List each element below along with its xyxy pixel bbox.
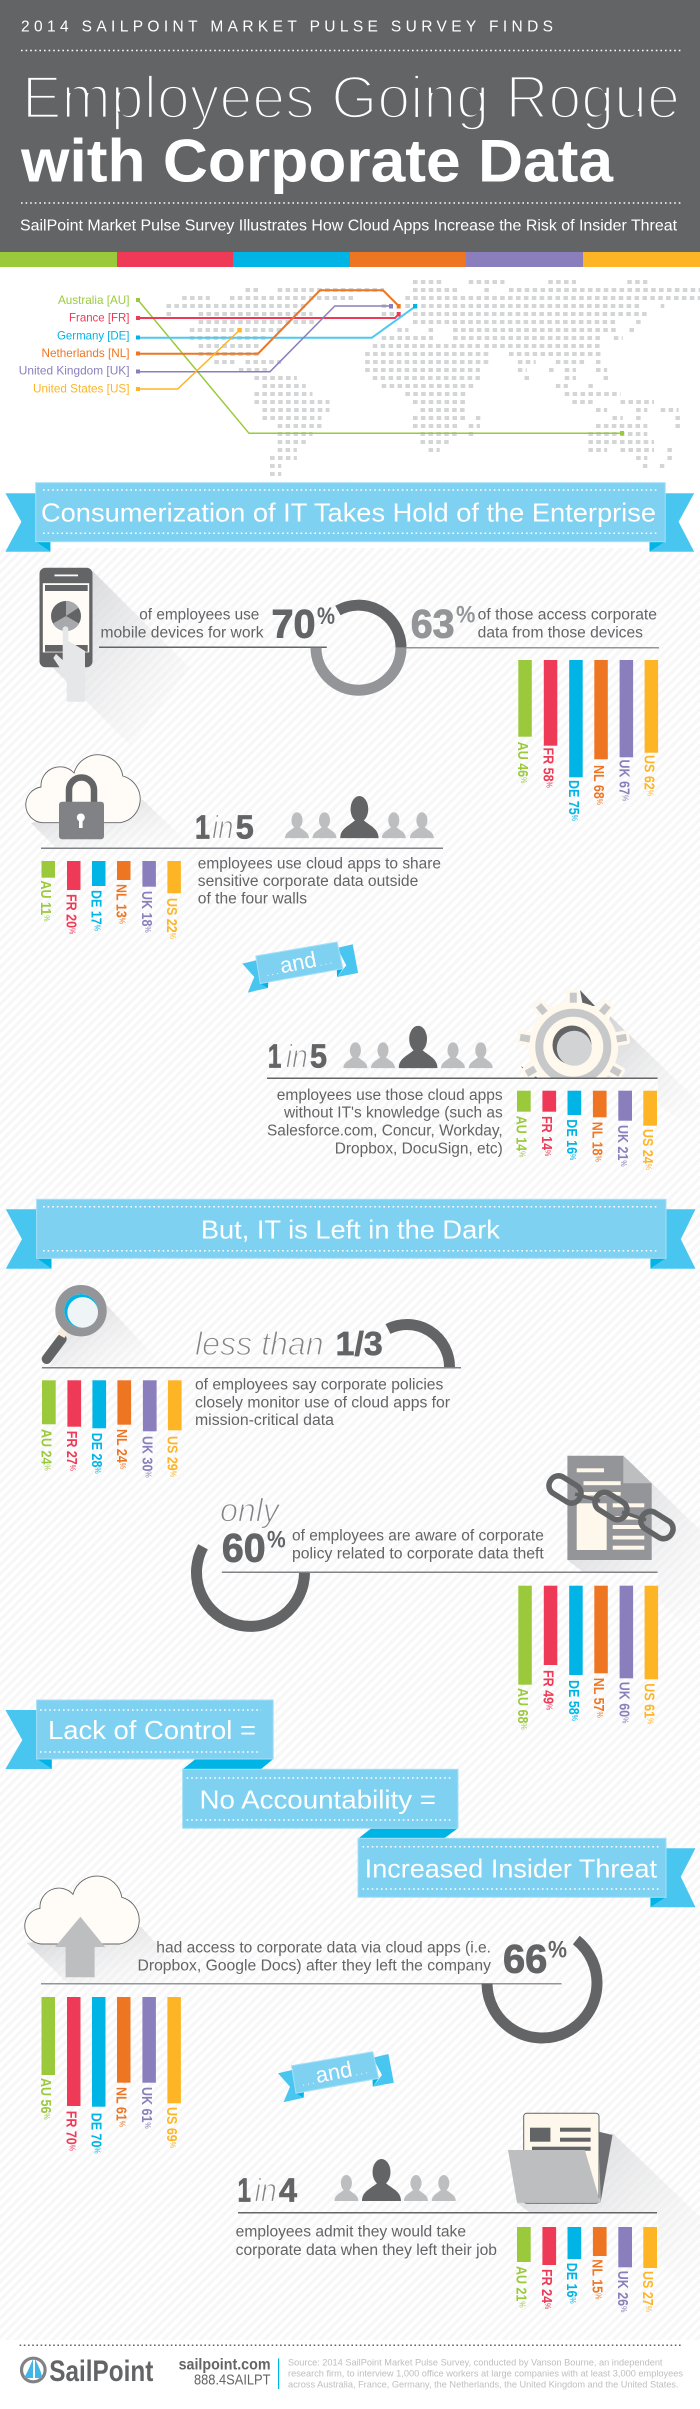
bar: FR 14: FR 14 <box>539 1116 555 1150</box>
people icons <box>343 1026 493 1068</box>
contact details: 888.4SAILPT <box>194 2371 270 2388</box>
bar: FR 24: % <box>543 2303 553 2309</box>
bar: FR 58: % <box>544 782 554 788</box>
stat: 1 in 4: 4 <box>279 2172 298 2209</box>
stat: 1 in 5 share data <box>41 796 443 907</box>
bar: US 27 <box>640 2227 657 2312</box>
stat: 66 percent: had access to corporate data via cloud apps (i.e. <box>156 1940 491 1957</box>
bar: AU 21: % <box>518 2301 527 2308</box>
bar: AU 68: % <box>519 1723 529 1730</box>
stat: 1 in 5 share data: sensitive corporate data outside <box>198 873 418 890</box>
bar: AU 68 <box>515 1586 532 1730</box>
stat: 70 percent: mobile devices for work <box>100 624 264 641</box>
bar: AU 68: AU 68 <box>515 1688 531 1723</box>
bar: FR 49 <box>540 1586 557 1710</box>
arc chart <box>197 1547 304 1626</box>
bar: NL 15: NL 15 <box>589 2259 606 2293</box>
line: United Kingdom <box>136 304 393 374</box>
bar: FR 20: FR 20 <box>63 894 80 928</box>
stat: 1 in 4: 1 <box>238 2172 251 2209</box>
stat: only 60 percent: only <box>220 1492 281 1529</box>
title line one: Employees Going Rogue <box>22 64 680 131</box>
stat: 1 in 5 share data: of the four walls <box>198 890 307 907</box>
bar: DE 58: DE 58 <box>566 1680 582 1715</box>
bar: US 22 <box>164 861 181 939</box>
header panel <box>0 0 700 252</box>
stat: 63 percent: 63 <box>411 602 454 646</box>
bar: UK 67: UK 67 <box>616 760 632 795</box>
ribbon: increased insider threat: Increased Insider Threat <box>365 1853 658 1883</box>
bar: US 69: US 69 <box>164 2107 180 2142</box>
bar: UK 61 <box>139 1997 156 2129</box>
bar: UK 21: UK 21 <box>615 1125 631 1160</box>
stat: 1 in 5 share data: 5 <box>236 808 254 845</box>
bar: NL 61: % <box>118 2121 127 2127</box>
stat: 1 in 5 without IT knowledge: in <box>286 1037 308 1074</box>
stat: 1 in 5 share data: 1 <box>195 808 210 845</box>
bar: UK 67: % <box>620 795 630 801</box>
bar: US 61: US 61 <box>641 1683 657 1718</box>
title line two: with Corporate Data <box>20 128 614 195</box>
bar: NL 24: NL 24 <box>114 1429 130 1463</box>
stat: 1 in 5 share data: employees use cloud apps to share <box>198 855 441 872</box>
bar: FR 27: % <box>68 1465 78 1471</box>
icon: folder with document <box>508 2113 700 2300</box>
bar: NL 24 <box>114 1380 131 1469</box>
bar chart: mobile access by country <box>515 660 658 821</box>
ribbon heading: IT in the dark <box>6 1199 696 1269</box>
stat: 1 in 5 without IT knowledge: without IT's knowledge (such as <box>283 1105 503 1122</box>
country legend: Germany [DE] <box>57 328 130 342</box>
stat: 63 percent: of those access corporate <box>478 606 657 623</box>
bar: NL 24: % <box>118 1463 128 1469</box>
bar: FR 70 <box>63 1997 80 2151</box>
stat: 66 percent: 66 <box>503 1937 547 1981</box>
bar: FR 49: % <box>544 1704 554 1710</box>
bar: NL 61: NL 61 <box>113 2087 130 2121</box>
icon: cloud with upload arrow <box>25 1876 192 1983</box>
stat: less than one third <box>42 1325 461 1429</box>
map legend lines <box>136 290 624 436</box>
bar: FR 27 <box>64 1380 81 1471</box>
bar: FR 49: FR 49 <box>540 1670 557 1704</box>
line: Australia <box>136 298 624 436</box>
bar: DE 75 <box>566 660 583 821</box>
bar: DE 58: % <box>570 1715 580 1721</box>
stat: 1 in 5 without IT knowledge: employees use those cloud apps <box>277 1087 503 1104</box>
country legend: United States [US] <box>33 381 130 395</box>
bar: US 62 <box>641 660 658 796</box>
stat: 1 in 5 without IT knowledge: Dropbox, DocuSign, etc) <box>335 1140 503 1157</box>
bar chart: taking data by country <box>513 2227 657 2312</box>
bar: AU 46: % <box>519 777 529 783</box>
people icons <box>285 796 434 838</box>
bar: AU 56: AU 56 <box>38 2078 54 2113</box>
bar: US 27: US 27 <box>640 2271 656 2306</box>
ribbon: and: . . . and . . . <box>299 2053 369 2091</box>
line: Netherlands <box>136 290 401 356</box>
source note <box>288 2358 683 2391</box>
bar: DE 16: % <box>568 2297 578 2304</box>
bar: UK 60: UK 60 <box>616 1682 632 1717</box>
bar: UK 18: % <box>143 926 153 933</box>
bar: US 27: % <box>644 2306 654 2312</box>
bar: DE 16: DE 16 <box>564 1119 580 1154</box>
stat: 70 percent <box>99 602 335 647</box>
arc chart <box>487 1940 597 2038</box>
country legend: Australia [AU] <box>58 293 130 307</box>
bar chart: policy monitoring by country <box>38 1380 182 1478</box>
bar: NL 13: NL 13 <box>113 884 130 918</box>
dot world map <box>167 282 700 474</box>
bar: UK 30 <box>139 1380 157 1478</box>
bar: UK 18: UK 18 <box>139 891 155 926</box>
bar: UK 26: % <box>619 2306 629 2312</box>
bar: UK 60: % <box>620 1717 630 1723</box>
bar: UK 21 <box>615 1091 632 1167</box>
bar: DE 16 <box>564 1091 581 1160</box>
bar: FR 70: % <box>68 2145 77 2151</box>
arc chart <box>388 1325 450 1367</box>
source note: across Australia, France, Germany, the Netherlands, the United Kingdom and the United States. <box>288 2380 679 2391</box>
bar: AU 46: AU 46 <box>515 742 531 777</box>
bar: AU 56 <box>38 1997 55 2120</box>
footer <box>0 2340 700 2409</box>
stat: only 60 percent: of employees are aware of corporate <box>292 1528 544 1545</box>
bar: DE 75: % <box>570 815 580 821</box>
ribbon: and <box>278 2052 394 2102</box>
bar: DE 16 <box>564 2227 581 2304</box>
bar: NL 18 <box>589 1091 607 1162</box>
stat: less than one third: less than <box>195 1325 324 1362</box>
bar: NL 18: % <box>593 1155 603 1162</box>
stat: 1 in 5 without IT knowledge: Salesforce.com, Concur, Workday, <box>267 1123 503 1140</box>
stat: 1 in 5 without IT knowledge: 5 <box>310 1037 327 1074</box>
country legend: United Kingdom [UK] <box>19 364 129 378</box>
stat: 1 in 4: employees admit they would take <box>236 2224 466 2241</box>
bar: US 61 <box>641 1586 658 1724</box>
stat: 63 percent: data from those devices <box>478 624 643 641</box>
bar: DE 58 <box>566 1586 583 1721</box>
subtitle: SailPoint Market Pulse Survey Illustrates How Cloud Apps Increase the Risk of Insider Threat <box>20 218 678 235</box>
bar: FR 24: FR 24 <box>539 2269 555 2303</box>
bar: UK 18 <box>139 861 156 933</box>
bar: DE 16: % <box>568 1154 578 1160</box>
bar: NL 15 <box>589 2227 607 2299</box>
bar: FR 58 <box>540 660 557 788</box>
bar: DE 28: % <box>93 1467 103 1474</box>
ribbon: lack of control: Lack of Control = <box>48 1715 256 1745</box>
country legend <box>19 293 129 395</box>
bar: NL 13 <box>113 861 130 924</box>
bar: US 62: % <box>645 790 655 796</box>
bar: AU 14: % <box>518 1151 527 1157</box>
bar: DE 70: DE 70 <box>88 2113 105 2147</box>
stat: 1 in 4: in <box>254 2172 277 2209</box>
bar: DE 17 <box>88 861 106 931</box>
stat: 1 in 5 without IT knowledge: 1 <box>268 1037 281 1074</box>
bar: UK 61: UK 61 <box>139 2087 155 2122</box>
bar: AU 21 <box>513 2227 531 2308</box>
bar: DE 70 <box>88 1997 106 2154</box>
bar: US 29 <box>164 1380 182 1477</box>
stat: 66 percent <box>41 1937 597 2038</box>
bar: NL 15: % <box>593 2293 603 2299</box>
line: France <box>136 312 401 320</box>
ring chart: 70 and 63 percent <box>316 605 401 690</box>
stat: 1 in 5 share data: in <box>212 808 234 845</box>
bar: AU 14 <box>513 1091 531 1157</box>
bar: DE 17: % <box>93 925 102 931</box>
icon: gear <box>516 990 674 1096</box>
bar: US 24 <box>640 1091 657 1170</box>
bar: US 61: % <box>645 1718 655 1724</box>
bar: AU 24 <box>38 1380 56 1471</box>
people icons <box>334 2159 456 2201</box>
bar: FR 20 <box>63 861 80 934</box>
stat: less than one third: of employees say corporate policies <box>195 1376 444 1393</box>
ribbon: no accountability: No Accountability = <box>200 1784 436 1814</box>
country legend: Netherlands [NL] <box>42 346 130 360</box>
bar: US 69: % <box>168 2142 178 2148</box>
bar: DE 28: DE 28 <box>89 1433 105 1467</box>
bar: FR 20: % <box>68 928 77 934</box>
bar: UK 60 <box>616 1586 633 1723</box>
source note: research firm, to interview 1,000 office workers at large companies with at least 3,000 employees <box>288 2369 683 2380</box>
bar: NL 57: NL 57 <box>591 1678 607 1711</box>
ribbon: increased insider threat <box>358 1838 696 1907</box>
stat: only 60 percent <box>197 1492 658 1626</box>
bar: FR 24 <box>539 2227 556 2309</box>
colour bar <box>0 252 700 267</box>
bar: AU 46 <box>515 660 532 783</box>
stat: 66 percent: Dropbox, Google Docs) after they left the company <box>138 1958 491 1975</box>
line: Germany <box>136 304 417 340</box>
bar chart: post-employment access by country <box>38 1997 181 2154</box>
bar: UK 30: % <box>143 1471 153 1478</box>
bar chart: cloud sharing by country <box>38 861 181 939</box>
bar: NL 57 <box>591 1586 608 1718</box>
ribbon: and <box>242 942 358 993</box>
bar: DE 75: DE 75 <box>566 780 582 815</box>
bar: FR 58: FR 58 <box>540 748 557 782</box>
icon: magnifying glass <box>47 1290 164 1366</box>
stat: only 60 percent: % <box>267 1526 286 1553</box>
stat: 1 in 4: corporate data when they left their job <box>236 2242 497 2259</box>
bar: AU 24: % <box>43 1464 52 1471</box>
stat: less than one third: closely monitor use of cloud apps for <box>195 1394 450 1411</box>
stat: 1 in 4 <box>236 2159 657 2259</box>
bar: DE 17: DE 17 <box>88 890 105 925</box>
bar: DE 16: DE 16 <box>564 2263 580 2297</box>
bar: NL 68: NL 68 <box>591 765 607 799</box>
icon: phone with hand <box>40 568 190 745</box>
bar: AU 21: AU 21 <box>513 2266 530 2301</box>
ribbon heading: IT in the dark: But, IT is Left in the Dark <box>201 1214 501 1244</box>
bar: FR 14: % <box>543 1150 553 1156</box>
bar: US 29: % <box>168 1471 178 1477</box>
bar: US 22: % <box>168 933 178 939</box>
bar: NL 61 <box>113 1997 130 2127</box>
stat: less than one third: mission-critical data <box>195 1412 334 1429</box>
stat: 70 percent: % <box>317 603 335 630</box>
bar: UK 61: % <box>143 2122 153 2129</box>
bar: AU 11: AU 11 <box>38 880 54 915</box>
bar: AU 14: AU 14 <box>513 1116 530 1151</box>
icon: cloud with padlock <box>26 755 192 847</box>
bar: AU 56: % <box>42 2113 52 2120</box>
bar: US 22: US 22 <box>164 898 180 933</box>
stat: 63 percent <box>406 602 659 648</box>
icon: documents and chain <box>546 1456 700 1640</box>
bar chart: unsanctioned apps by country <box>513 1091 657 1170</box>
bar: AU 11: % <box>42 915 52 922</box>
bar: NL 13: % <box>118 918 127 924</box>
stat: only 60 percent: policy related to corporate data theft <box>292 1545 544 1562</box>
stat: 1 in 5 without IT knowledge <box>267 1026 658 1157</box>
stat: 70 percent: 70 <box>272 602 316 646</box>
eyebrow text: 2014 SAILPOINT MARKET PULSE SURVEY FINDS <box>21 19 553 36</box>
bar: UK 26: UK 26 <box>615 2271 631 2306</box>
stat: 63 percent: % <box>456 602 475 629</box>
ribbon: and: . . . and . . . <box>263 944 333 981</box>
contact details: sailpoint.com <box>179 2356 270 2373</box>
bar: US 29: US 29 <box>164 1436 181 1471</box>
stat: less than one third: 1/3 <box>336 1325 383 1362</box>
ribbon: no accountability <box>183 1769 458 1838</box>
ribbon heading: consumerization: Consumerization of IT Takes Hold of the Enterprise <box>41 498 656 528</box>
ribbon heading: consumerization <box>5 483 694 552</box>
bar: FR 14 <box>539 1091 556 1156</box>
source note: Source: 2014 SailPoint Market Pulse Survey, conducted by Vanson Bourne, an independent <box>288 2358 663 2369</box>
bar: AU 11 <box>38 861 55 922</box>
bar: NL 68: % <box>595 799 605 805</box>
bar: UK 30: UK 30 <box>139 1436 156 1471</box>
logo: SailPoint: SailPoint <box>49 2355 153 2388</box>
contact details <box>179 2356 270 2388</box>
bar: AU 24: AU 24 <box>38 1429 55 1464</box>
bar: DE 70: % <box>93 2147 102 2154</box>
bar: US 62: US 62 <box>641 755 657 790</box>
bar: FR 27: FR 27 <box>64 1431 80 1465</box>
bar: US 24: US 24 <box>640 1129 656 1164</box>
bar: NL 57: % <box>595 1711 605 1718</box>
bar: US 24: % <box>644 1164 654 1170</box>
bar: UK 26 <box>615 2227 632 2312</box>
bar: NL 18: NL 18 <box>589 1122 606 1155</box>
country legend: France [FR] <box>69 311 130 325</box>
bar: US 69 <box>164 1997 181 2148</box>
stat: 70 percent: of employees use <box>139 606 259 623</box>
ribbon: lack of control <box>5 1700 273 1769</box>
bar: UK 21: % <box>619 1160 629 1167</box>
bar: FR 70: FR 70 <box>63 2111 80 2145</box>
bar: DE 28 <box>89 1380 106 1474</box>
bar: UK 67 <box>616 660 633 801</box>
logo: SailPoint <box>22 2355 153 2388</box>
stat: only 60 percent: 60 <box>222 1527 266 1571</box>
line: United States <box>136 328 242 391</box>
stat: 66 percent: % <box>548 1937 567 1964</box>
bar: NL 68 <box>591 660 608 805</box>
striped background <box>0 548 700 2340</box>
bar chart: policy awareness by country <box>515 1586 658 1730</box>
